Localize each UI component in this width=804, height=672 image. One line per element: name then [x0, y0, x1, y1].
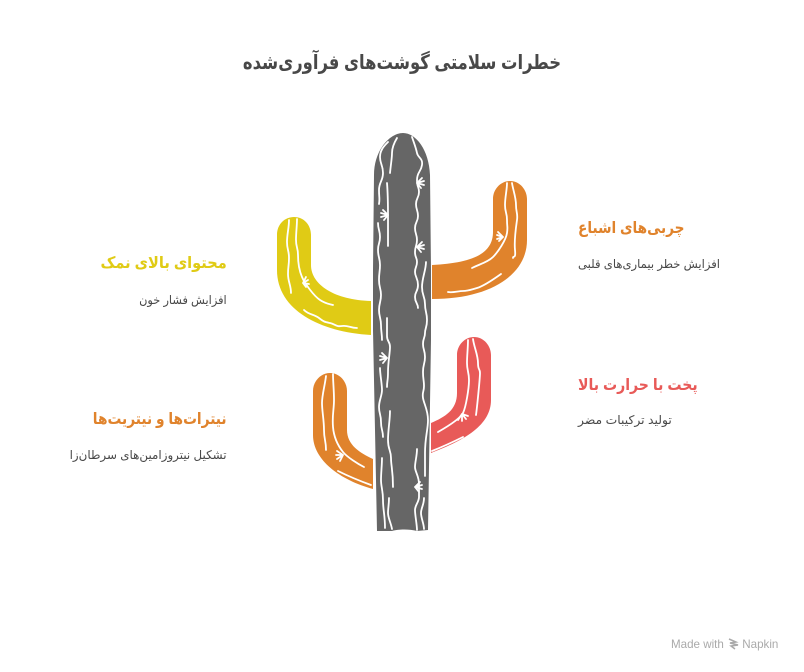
- cactus trunk: [373, 133, 431, 531]
- arm: orange, saturated fats: [432, 181, 527, 299]
- description: saturated fats: افزایش خطر بیماری‌های قلبی: [578, 257, 720, 271]
- title: خطرات سلامتی گوشت‌های فرآوری‌شده: [243, 52, 561, 74]
- spikes on trunk: [380, 178, 424, 492]
- label: nitrates and nitrites: نیترات‌ها و نیتریت‌ها: [93, 411, 227, 428]
- label: high salt: محتوای بالای نمک: [101, 255, 227, 272]
- footer: made with Napkin: Made with Napkin: [671, 638, 778, 651]
- description: high salt: افزایش فشار خون: [139, 293, 227, 307]
- arm: orange, nitrates and nitrites: [313, 373, 373, 489]
- description: high heat cooking: تولید ترکیبات مضر: [578, 413, 672, 427]
- description: nitrates and nitrites: تشکیل نیتروزامین‌های سرطان‌زا: [70, 448, 227, 462]
- label: high heat cooking: پخت با حرارت بالا: [578, 377, 698, 394]
- arm: red, high heat cooking: [431, 337, 491, 453]
- arm: yellow, high salt: [277, 217, 371, 335]
- label: saturated fats: چربی‌های اشباع: [578, 220, 685, 237]
